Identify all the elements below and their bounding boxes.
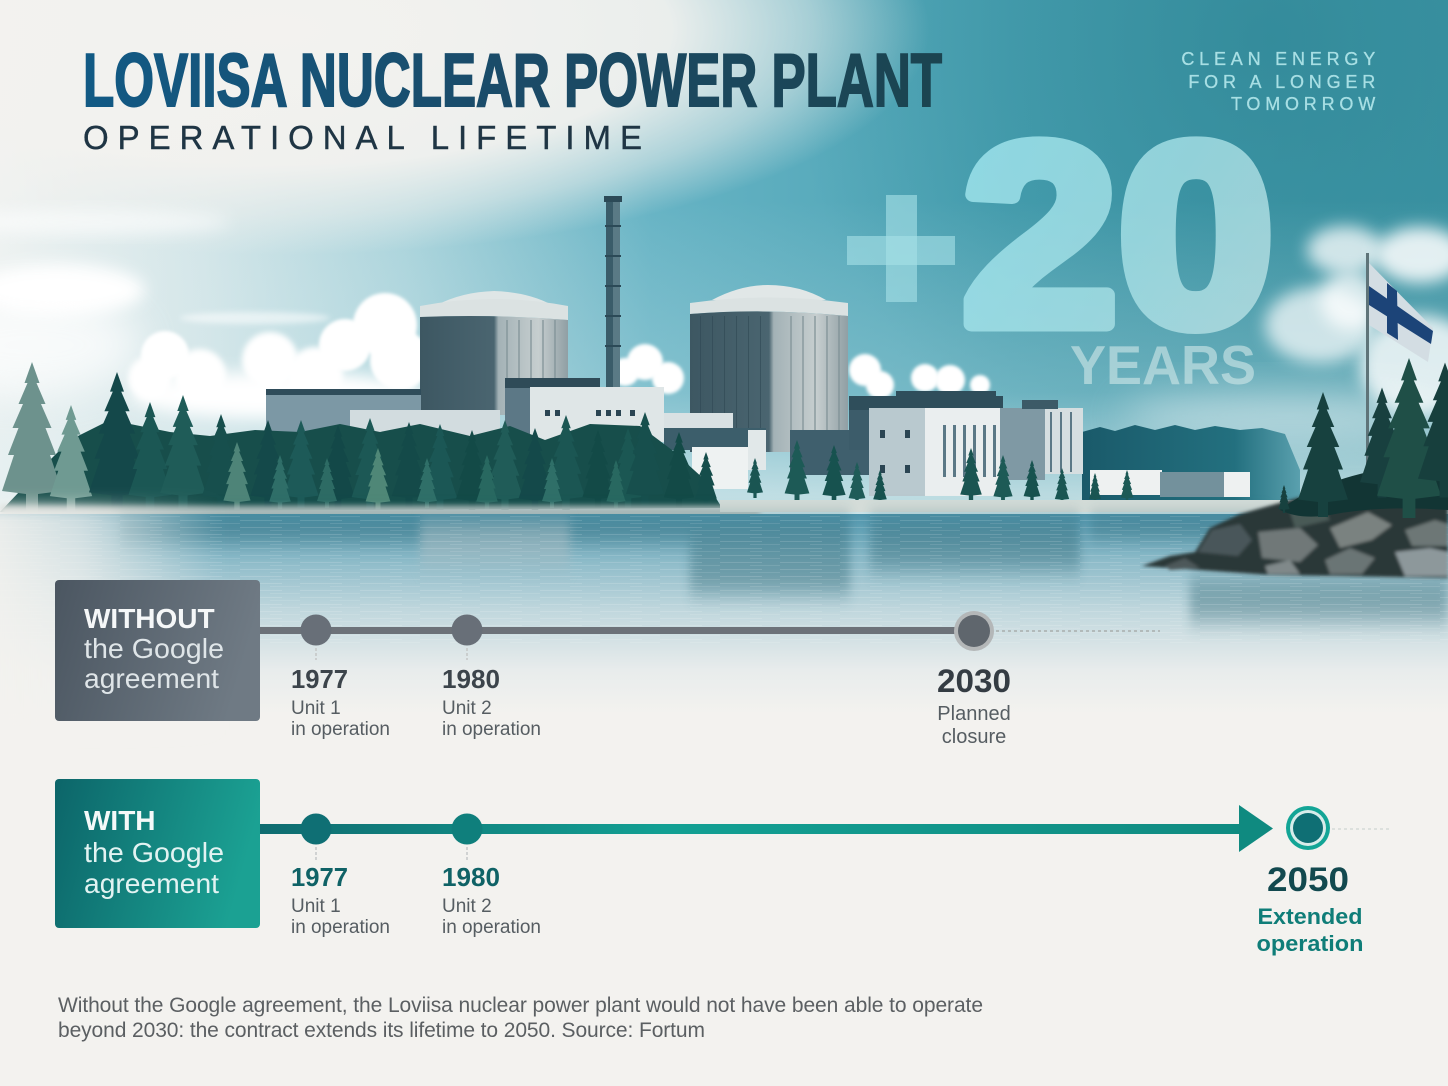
arrow <box>260 805 1273 852</box>
footnote <box>58 994 983 1042</box>
node 2050: operation <box>1256 931 1364 956</box>
island trees <box>1278 358 1448 518</box>
far treeline <box>1082 425 1300 500</box>
node 2050 <box>1256 806 1364 956</box>
node 1980: Unit 2 <box>442 698 492 719</box>
rocks <box>1142 476 1448 578</box>
node 1977: 1977 <box>291 862 348 892</box>
timeline line <box>260 627 960 634</box>
node 1980 <box>442 614 541 740</box>
label box: with: the Google <box>84 837 224 868</box>
node 1980: 1980 <box>442 862 500 892</box>
big +20 years: YEARS <box>1070 334 1256 396</box>
node 1977: in operation <box>291 917 390 938</box>
clouds <box>0 210 1448 439</box>
tagline: CLEAN ENERGY <box>1181 49 1380 69</box>
footnote: beyond 2030: the contract extends its lifetime to 2050. Source: Fortum <box>58 1019 705 1042</box>
sky <box>0 0 1448 520</box>
node 1977 <box>291 814 390 938</box>
tagline: FOR A LONGER <box>1188 72 1380 92</box>
shoreline <box>0 500 1280 519</box>
node 2030: 2030 <box>937 663 1011 699</box>
power plant <box>266 196 1250 497</box>
node 1977 <box>291 614 390 740</box>
label box: with: agreement <box>84 868 219 899</box>
label box: with: WITH <box>84 805 156 836</box>
node 1977: 1977 <box>291 664 348 694</box>
tagline: TOMORROW <box>1231 94 1380 114</box>
dotted continuation <box>1332 828 1390 830</box>
subtitle: OPERATIONAL LIFETIME <box>83 119 642 156</box>
flag of Finland <box>1369 263 1433 362</box>
node 1980: in operation <box>442 719 541 740</box>
title: LOVIISA NUCLEAR POWER PLANT <box>83 38 942 122</box>
label box: without: WITHOUT <box>84 603 215 634</box>
node 1977: Unit 1 <box>291 896 341 917</box>
node 1977: in operation <box>291 719 390 740</box>
right reactor <box>690 285 848 452</box>
node 2030: closure <box>942 726 1006 748</box>
big +20 years: 20 <box>962 90 1274 379</box>
node 2050: 2050 <box>1267 861 1349 899</box>
label box: without: agreement <box>84 663 219 694</box>
island with trees <box>1142 253 1448 578</box>
tagline <box>1181 49 1380 114</box>
chimney stack <box>604 196 622 388</box>
label box: with <box>55 779 260 928</box>
footnote: Without the Google agreement, the Loviisa nuclear power plant would not have been able to operate <box>58 994 983 1017</box>
flagpole <box>1366 253 1369 485</box>
node 2050: Extended <box>1258 904 1362 929</box>
node 2030: Planned <box>937 703 1011 725</box>
node 1980: Unit 2 <box>442 896 492 917</box>
big +20 years <box>847 90 1274 396</box>
label box: without: the Google <box>84 633 224 664</box>
dotted continuation <box>996 630 1160 632</box>
timeline: without agreement <box>55 580 1160 748</box>
buildings <box>266 378 1250 497</box>
label box: without <box>55 580 260 721</box>
node 1980 <box>442 814 541 938</box>
timeline: with agreement <box>55 779 1390 956</box>
node 1977: Unit 1 <box>291 698 341 719</box>
trees: left forest <box>0 362 1133 512</box>
node 2030 <box>937 611 1011 748</box>
node 1980: 1980 <box>442 664 500 694</box>
left reactor <box>420 291 568 415</box>
node 1980: in operation <box>442 917 541 938</box>
water <box>0 505 1448 730</box>
